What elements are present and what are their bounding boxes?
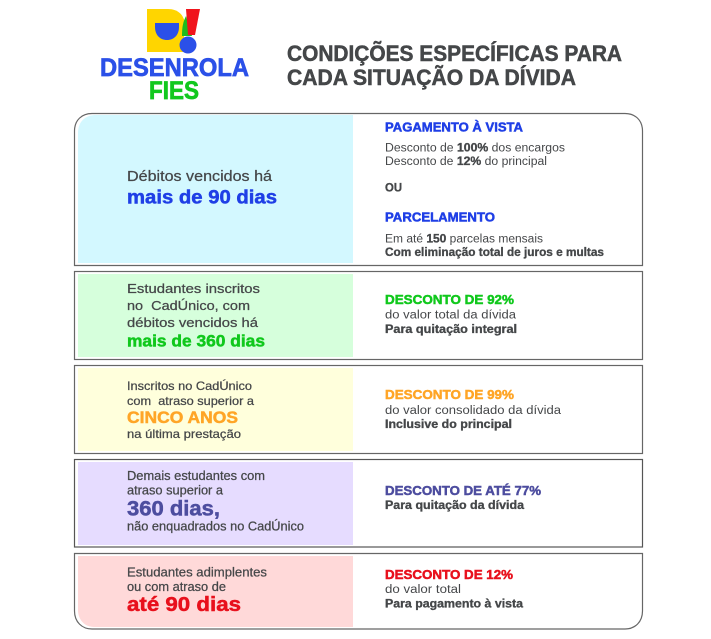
benefit text (385, 120, 604, 259)
benefit text: Para quitação da dívida (385, 500, 525, 512)
condition text: não enquadrados no CadÚnico (127, 518, 304, 534)
condition text: Demais estudantes com (127, 469, 265, 483)
benefit text (385, 387, 562, 431)
benefit text (385, 483, 541, 512)
condition text: ou com atraso de (127, 580, 226, 594)
icon: red exclamation mark (186, 9, 200, 35)
condition text: no CadÚnico, com (127, 298, 250, 313)
benefit text: PAGAMENTO À VISTA (385, 120, 524, 134)
panel: adimplentes até 90 dias (74, 554, 642, 629)
condition text: Estudantes inscritos (127, 281, 261, 296)
benefit text: DESCONTO DE 92% (385, 292, 514, 307)
condition text: 360 dias, (127, 498, 220, 520)
title: CADA SITUAÇÃO DA DÍVIDA (287, 65, 576, 90)
condition text: Débitos vencidos há (127, 168, 273, 185)
panel: CadÚnico mais de 360 dias (74, 272, 642, 360)
logo word: DESENROLA: DESENROLA (100, 54, 249, 82)
benefit text: OU (385, 180, 402, 194)
condition text: até 90 dias (127, 594, 241, 616)
icon: green wedge (182, 16, 192, 36)
benefit text: Para pagamento à vista (385, 598, 524, 610)
condition text: Inscritos no CadÚnico (127, 378, 252, 393)
condition text (127, 378, 254, 441)
condition text: débitos vencidos há (127, 315, 259, 330)
benefit text: Para quitação integral (385, 324, 517, 336)
icon: yellow D (147, 9, 185, 52)
condition text: na última prestação (127, 427, 241, 441)
logo word: FIES: FIES (149, 77, 199, 105)
condition text (127, 566, 267, 616)
benefit text: do valor consolidado da dívida (385, 405, 562, 417)
benefit text: DESCONTO DE 99% (385, 387, 514, 402)
icon: blue bowl (155, 23, 179, 40)
condition text: CINCO ANOS (127, 408, 238, 427)
benefit text: do valor total da dívida (385, 310, 517, 322)
condition text (127, 168, 277, 208)
benefit text: Desconto de 100% dos encargos (385, 142, 565, 154)
panel: débitos há mais de 90 dias (74, 114, 642, 266)
condition text: mais de 360 dias (127, 332, 265, 350)
condition text (127, 469, 304, 534)
benefit text: PARCELAMENTO (385, 210, 495, 224)
condition text: com atraso superior a (127, 394, 254, 408)
benefit text: DESCONTO DE ATÉ 77% (385, 483, 541, 498)
panel: CadÚnico cinco anos (74, 366, 642, 454)
benefit text: Com eliminação total de juros e multas (385, 247, 604, 259)
condition text: atraso superior a (127, 484, 223, 498)
title (287, 41, 622, 90)
condition text: Estudantes adimplentes (127, 566, 267, 580)
benefit text: do valor total (385, 584, 461, 596)
icon: blue circle (180, 36, 196, 54)
title: CONDIÇÕES ESPECÍFICAS PARA (287, 41, 622, 66)
panel: demais estudantes 360 dias (74, 460, 642, 547)
benefit text: DESCONTO DE 12% (385, 567, 513, 582)
benefit text (385, 292, 517, 336)
benefit text (385, 567, 524, 610)
condition text (127, 281, 265, 350)
logo: Desenrola FIES (100, 9, 249, 105)
benefit text: Inclusive do principal (385, 419, 512, 431)
benefit text: Desconto de 12% do principal (385, 156, 547, 168)
condition text: mais de 90 dias (127, 188, 277, 208)
benefit text: Em até 150 parcelas mensais (385, 234, 543, 246)
